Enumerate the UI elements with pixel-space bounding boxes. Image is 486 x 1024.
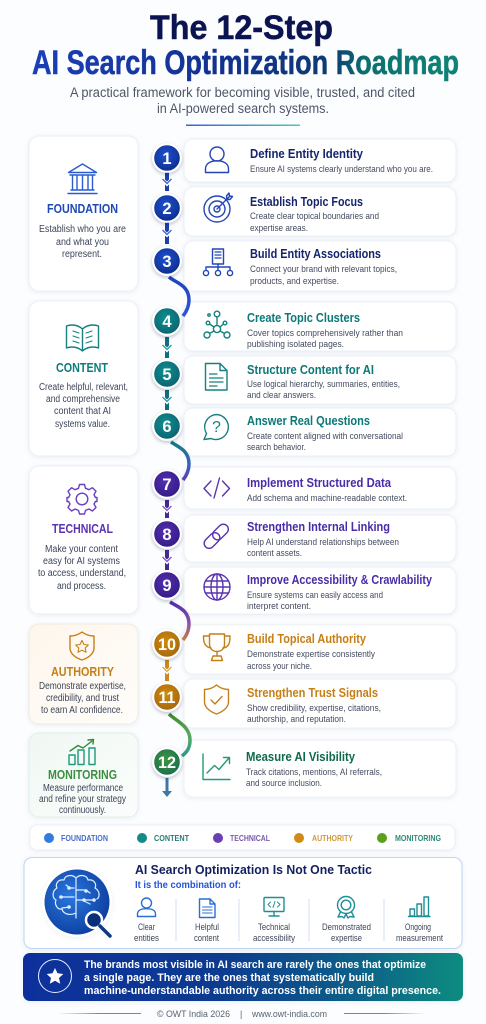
text: step 12: Track citations, mentions, AI referrals,: [246, 767, 382, 777]
text: takeaway: machine-understandable authority across their entire digital presence.: [84, 985, 441, 997]
step number: 9: 9: [162, 577, 172, 595]
description: monitoring: and refine your strategy: [39, 794, 126, 805]
legend: MONITORING: [395, 834, 441, 843]
legend: TECHNICAL: [230, 834, 270, 843]
connector: step 6 to 7: [171, 442, 189, 480]
heading: monitoring: MONITORING: [48, 767, 117, 782]
icon: code brackets: [204, 478, 230, 498]
subtitle: A practical framework for becoming visible, trusted, and cited: [70, 85, 415, 101]
step number: 8: 8: [162, 526, 172, 544]
subheading: combination: It is the combination of:: [135, 880, 241, 891]
step number: 1: [153, 144, 181, 172]
connector: step 8 to 9: [162, 550, 172, 570]
icon: globe: [204, 574, 230, 600]
arrow: after step 12: [162, 778, 172, 797]
text: step 11: Strengthen Trust Signals: [247, 685, 378, 700]
text: step 11: Show credibility, expertise, citations,: [247, 703, 381, 713]
text: step 1: Define Entity Identity: [250, 146, 364, 161]
footer: |: [240, 1009, 242, 1019]
text: step 2: expertise areas.: [250, 223, 308, 233]
step number: 3: [153, 247, 181, 275]
step number: 2: [153, 194, 181, 222]
legend: CONTENT: [154, 834, 189, 843]
text: step 9: Ensure systems can easily access and: [247, 590, 383, 600]
panel: authority: [29, 624, 138, 724]
description: technical: Make your content: [45, 544, 118, 555]
description: foundation: [39, 224, 126, 260]
panel: monitoring: [29, 733, 138, 817]
item: clear entities: entities: [134, 933, 159, 943]
item: ongoing measurement: [396, 897, 443, 943]
step number: 3: 3: [162, 253, 172, 271]
card: step 11: [184, 679, 456, 728]
step number: 5: [153, 360, 181, 388]
icon: institution building: [68, 164, 97, 194]
step number: 12: [153, 748, 181, 776]
step number: 11: [153, 683, 181, 711]
icon: organisation: [203, 249, 233, 276]
text: step 8: Strengthen Internal Linking: [247, 519, 390, 534]
item: demonstrated expertise: [322, 896, 371, 943]
icon: open book: [66, 325, 98, 351]
description: authority: Demonstrate expertise,: [39, 681, 126, 692]
description: content: and comprehensive: [46, 394, 120, 405]
text: step 5: and clear answers.: [247, 390, 316, 400]
item: ongoing measurement: measurement: [396, 933, 443, 943]
description: foundation: Establish who you are: [39, 224, 126, 235]
panel: technical: [29, 466, 138, 614]
text: step 4: publishing isolated pages.: [247, 339, 344, 349]
text: step 10: [247, 631, 375, 671]
text: step 6: search behavior.: [247, 442, 306, 452]
step number: 5: 5: [162, 366, 172, 384]
text: step 5: Use logical hierarchy, summaries, entities,: [247, 379, 400, 389]
panel: content: [29, 301, 138, 456]
text: step 4: Cover topics comprehensively rather than: [247, 328, 403, 338]
card: step 9: [184, 567, 456, 614]
connector: step 9 to 10: [170, 602, 189, 640]
icon: growth bars: [69, 740, 95, 764]
icon: document: [206, 364, 227, 390]
text: step 3: [250, 246, 397, 286]
text: step 9: [247, 572, 433, 611]
footer: www.owt-india.com: [251, 1009, 327, 1019]
text: step 8: Help AI understand relationships between: [247, 537, 399, 547]
item: demonstrated expertise: Demonstrated: [322, 922, 371, 932]
text: step 4: Create Topic Clusters: [247, 310, 360, 325]
item: helpful content: content: [194, 933, 219, 943]
text: step 12: Measure AI Visibility: [246, 749, 356, 764]
text: step 12: and source inclusion.: [246, 778, 322, 788]
connector: step 2 to 3: [162, 222, 172, 244]
icon: AI brain with magnifier: [42, 867, 112, 937]
text: step 3: Connect your brand with relevant topics,: [250, 264, 397, 274]
subtitle: [70, 85, 415, 117]
text: step 1: Ensure AI systems clearly understand who you are.: [250, 164, 433, 174]
text: step 12: [246, 749, 382, 788]
text: step 3: products, and expertise.: [250, 276, 339, 286]
heading: content: CONTENT: [56, 360, 108, 375]
icon: question bubble: [204, 414, 228, 440]
card: step 6: [184, 408, 456, 456]
connector: step 11 to 12: [169, 714, 190, 756]
legend: AUTHORITY: [312, 834, 353, 843]
footer: [58, 1009, 425, 1019]
step number: 8: [153, 520, 181, 548]
connector: step 4 to 5: [162, 337, 172, 358]
item: helpful content: Helpful: [195, 922, 219, 932]
connector: step 7 to 8: [162, 500, 172, 518]
text: step 5: [247, 362, 400, 400]
text: step 4: [247, 310, 403, 349]
text: step 11: [247, 685, 381, 724]
heading: authority: AUTHORITY: [51, 664, 114, 679]
description: authority: credibility, and trust: [46, 693, 119, 704]
step number: 1: 1: [162, 150, 172, 168]
icon: trophy: [204, 634, 230, 660]
item: technical accessibility: [253, 898, 295, 943]
text: step 9: interpret content.: [247, 601, 311, 611]
description: monitoring: Measure performance: [43, 783, 123, 794]
text: step 6: Create content aligned with conversational: [247, 431, 403, 441]
text: step 6: Answer Real Questions: [247, 413, 370, 428]
panel: not one tactic: [24, 858, 462, 948]
text: takeaway: [84, 959, 441, 997]
step number: 4: 4: [162, 313, 172, 331]
text: step 11: authorship, and reputation.: [247, 714, 346, 724]
card: step 12: [184, 740, 456, 797]
description: authority: to earn AI confidence.: [41, 705, 123, 716]
step number: 6: 6: [162, 418, 172, 436]
legend: [30, 825, 455, 850]
card: step 2: [184, 187, 456, 236]
description: content: Create helpful, relevant,: [39, 382, 128, 393]
text: step 10: Build Topical Authority: [247, 631, 367, 646]
text: step 8: [247, 519, 399, 558]
text: step 7: Add schema and machine-readable context.: [247, 493, 407, 503]
text: step 8: content assets.: [247, 548, 302, 558]
description: foundation: and what you: [56, 237, 109, 248]
item: ongoing measurement: Ongoing: [405, 922, 431, 932]
description: authority: [39, 681, 126, 716]
description: content: content that AI: [54, 406, 111, 417]
heading: not one tactic: AI Search Optimization Is Not One Tactic: [135, 862, 372, 877]
connector: step 3 to 4: [169, 277, 189, 316]
text: step 3: Build Entity Associations: [250, 246, 381, 261]
item: helpful content: [194, 899, 219, 943]
step number: 11: 11: [158, 689, 176, 707]
icon: shield check: [204, 685, 228, 714]
step number: 6: [153, 412, 181, 440]
connector: step 1 to 2: [162, 172, 172, 191]
description: technical: to access, understand,: [38, 568, 126, 579]
footer: © OWT India 2026: [157, 1009, 230, 1019]
text: step 6: [247, 413, 403, 452]
step number: 4: [153, 307, 181, 335]
description: monitoring: [39, 783, 126, 816]
description: content: [39, 382, 128, 430]
text: step 10: Demonstrate expertise consistently: [247, 649, 375, 659]
description: technical: and process.: [57, 581, 106, 592]
connector: step 10 to 11: [162, 660, 172, 681]
step number: 10: [153, 630, 181, 658]
step number: 2: 2: [162, 200, 172, 218]
icon: chain link: [202, 522, 230, 550]
heading: technical: TECHNICAL: [52, 521, 113, 536]
icon: line chart: [203, 754, 230, 780]
step number: 10: 10: [158, 636, 176, 654]
description: technical: [38, 544, 126, 592]
card: step 3: [184, 241, 456, 291]
legend: FOUNDATION: [61, 834, 108, 843]
text: step 2: [250, 194, 379, 233]
card: step 4: [184, 302, 456, 351]
text: step 1: [250, 146, 433, 174]
subtitle: in AI-powered search systems.: [157, 101, 329, 117]
title: The 12-Step: [150, 9, 333, 47]
text: step 2: Create clear topical boundaries and: [250, 211, 379, 221]
step number: 7: [153, 470, 181, 498]
text: step 2: Establish Topic Focus: [250, 194, 363, 209]
icon: star badge: [38, 960, 72, 992]
icon: gear: [67, 484, 97, 514]
card: step 5: [184, 356, 456, 404]
icon: question bubble: ?: [212, 419, 221, 436]
description: foundation: represent.: [62, 249, 102, 260]
description: technical: easy for AI systems: [43, 556, 120, 567]
text: step 10: across your niche.: [247, 661, 312, 671]
card: step 1: [184, 139, 456, 182]
card: step 8: [184, 515, 456, 562]
item: demonstrated expertise: expertise: [331, 933, 362, 943]
item: clear entities: [134, 898, 159, 943]
icon: shield with star: [70, 632, 94, 660]
card: step 7: [184, 467, 456, 509]
connector: step 5 to 6: [162, 390, 172, 410]
step number: 12: 12: [158, 754, 176, 772]
description: content: systems value.: [55, 419, 110, 430]
card: step 10: [184, 625, 456, 674]
banner: key takeaway: [23, 953, 463, 1001]
icon: person: [206, 147, 228, 172]
text: step 7: Implement Structured Data: [247, 475, 392, 490]
heading: foundation: FOUNDATION: [47, 201, 118, 216]
step number: 7: 7: [162, 476, 172, 494]
step number: 9: [153, 571, 181, 599]
text: step 7: [247, 475, 407, 503]
title: [32, 9, 459, 82]
text: step 9: Improve Accessibility & Crawlability: [247, 572, 433, 587]
text: takeaway: The brands most visible in AI search are rarely the ones that optimize: [84, 959, 426, 971]
icon: topic cluster: [204, 311, 230, 338]
panel: foundation: [29, 136, 138, 291]
item: technical accessibility: accessibility: [253, 933, 295, 943]
description: monitoring: continuously.: [59, 805, 106, 816]
text: takeaway: a single page. They are the ones that systematically build: [84, 972, 374, 984]
item: technical accessibility: Technical: [258, 922, 290, 932]
item: clear entities: Clear: [138, 922, 155, 932]
icon: target: [204, 193, 232, 222]
text: step 5: Structure Content for AI: [247, 362, 374, 377]
